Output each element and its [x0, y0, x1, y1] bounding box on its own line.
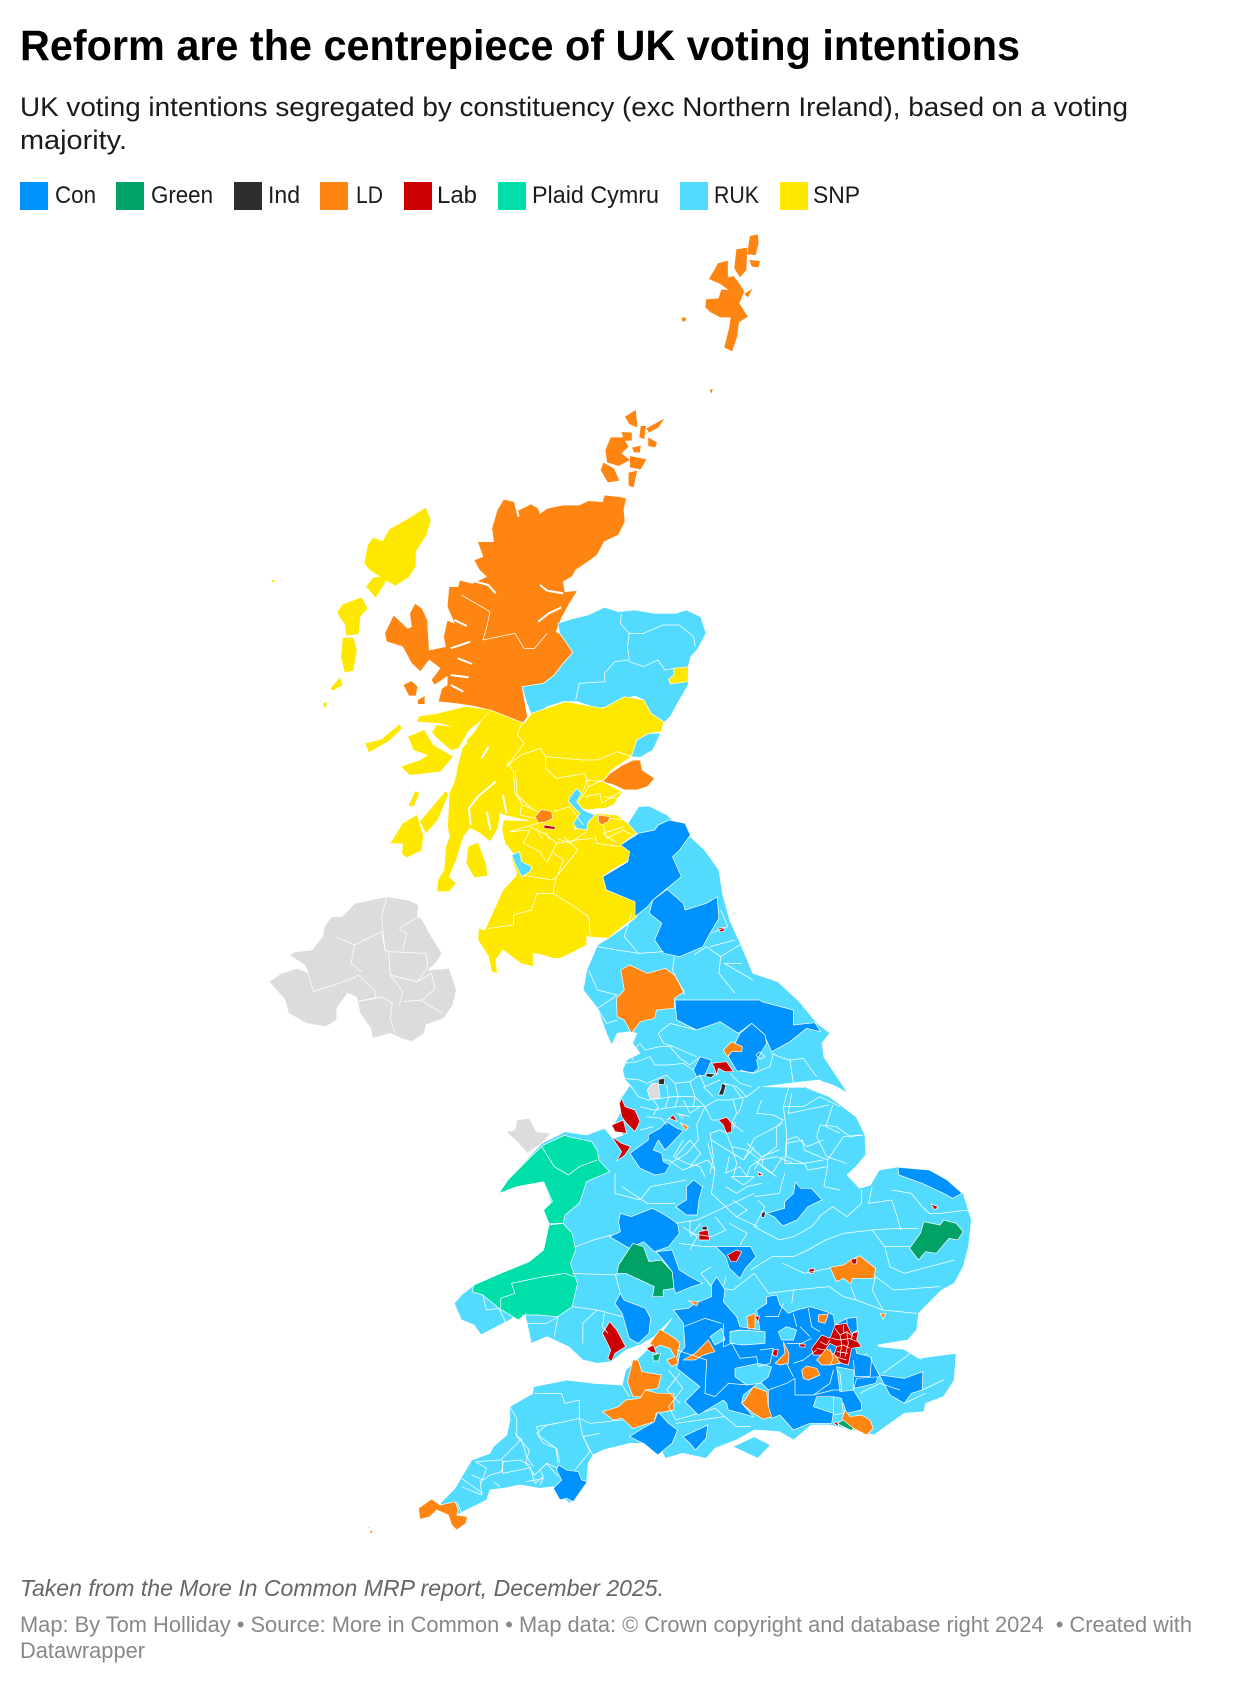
footer: byline and credits: Map: By Tom Holliday • Source: More in Common • Map data: © Crown copyright and database right 2024 • Created with — [20, 1612, 1192, 1637]
legend: Lab — [437, 182, 477, 209]
legend: SNP — [813, 182, 860, 209]
title: Reform are the centrepiece of UK voting intentions — [20, 22, 1020, 70]
map: UK constituencies — [269, 234, 971, 1533]
South East England: Conservative belt, London and Lib Dem seats — [647, 1277, 900, 1435]
Devon and Cornwall — [367, 1423, 600, 1533]
legend: Green — [151, 182, 213, 209]
subtitle: UK voting intentions segregated by constituency (exc Northern Ireland), based on a voting — [20, 92, 1128, 122]
Northern England: Yorkshire, Lancashire, Merseyside, Manchester, Sheffield — [612, 1000, 863, 1177]
footer: byline and credits: Datawrapper — [20, 1638, 145, 1663]
Anglesey — [506, 1118, 551, 1153]
Midlands Conservative areas — [610, 1208, 679, 1252]
London — [812, 1323, 862, 1365]
notes: source description: Taken from the More In Common MRP report, December 2025. — [20, 1575, 664, 1601]
legend: LD — [356, 182, 383, 209]
legend: RUK — [714, 182, 759, 209]
Central and southern Scotland — [269, 697, 753, 1042]
legend — [20, 182, 860, 210]
Glasgow, Edinburgh and the Forth — [507, 762, 635, 877]
Northern Scotland: Shetland, Orkney, Highlands, Lewis, Aberdeenshire — [271, 234, 760, 725]
South West regions — [627, 1360, 661, 1397]
legend: Con — [55, 182, 96, 209]
constituency borders, south and midlands — [819, 1190, 861, 1217]
subtitle: majority. — [20, 125, 127, 155]
legend: Plaid Cymru — [532, 182, 659, 209]
Wales: Plaid Cymru — [499, 1135, 610, 1223]
legend: Ind — [268, 182, 300, 209]
England and Wales base (RUK) — [440, 806, 971, 1515]
Northern Ireland — [269, 897, 456, 1042]
